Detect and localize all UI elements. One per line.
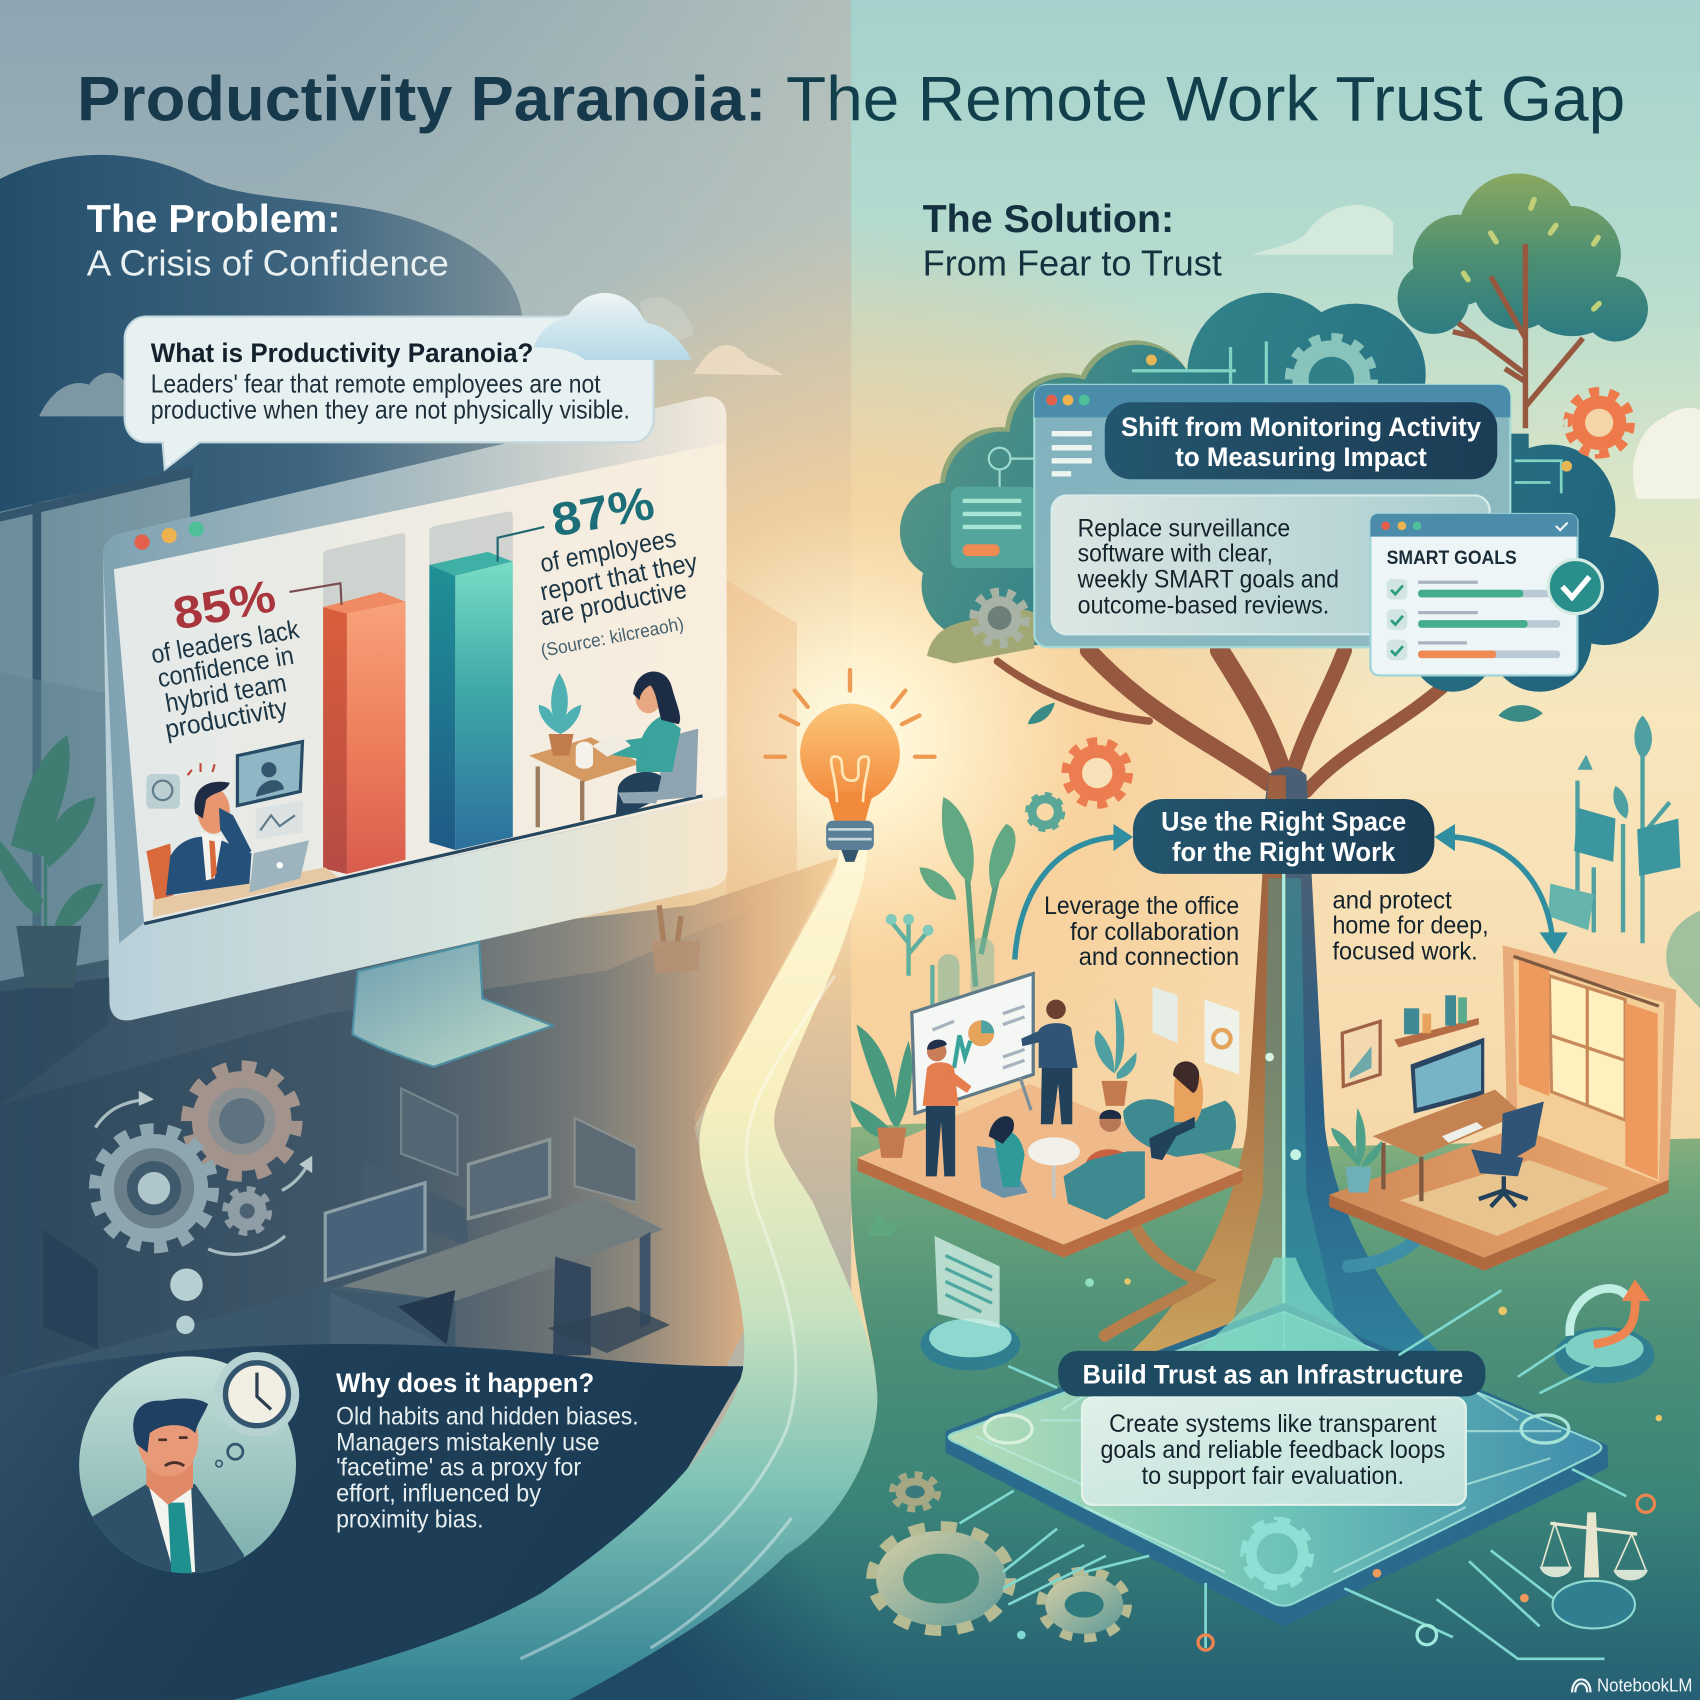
brown gear [188, 1067, 296, 1175]
leader line: 85 percent [289, 583, 342, 605]
title: The Remote Work Trust Gap [786, 64, 1625, 134]
road highlights [520, 976, 835, 1659]
office collaboration scene [850, 974, 1242, 1258]
stat: 85 percent: of leaders lack [149, 614, 302, 669]
text: protect home: home for deep, [1332, 911, 1489, 939]
arrow to home [1434, 824, 1568, 954]
orange gear mid [1066, 742, 1129, 804]
dark hill behind the problem heading [0, 155, 523, 607]
distant building silhouette [726, 580, 797, 911]
steel gear [95, 1130, 212, 1247]
home floor [1329, 1180, 1669, 1271]
card: replace surveillance: Replace surveillance [1078, 515, 1290, 543]
pill: right space: for the Right Work [1172, 836, 1396, 867]
home plant [1331, 1108, 1382, 1193]
stressed manager at a laptop [146, 742, 338, 917]
large gear [872, 1527, 1010, 1631]
window: smart goals checklist: SMART GOALS [1387, 547, 1517, 569]
heading: the problem: The Problem: [87, 198, 340, 241]
road from fear to trust [233, 824, 877, 1700]
large plant [850, 1025, 912, 1158]
clock thought [215, 1352, 299, 1467]
pill: shift heading: Shift from Monitoring Activity [1121, 411, 1481, 442]
text: why does it happen: 'facetime' as a proxy for [336, 1454, 581, 1482]
stat: 87 percent: are productive [538, 574, 689, 631]
card: create systems: to support fair evaluation. [1142, 1462, 1404, 1490]
stat: 85 percent: productivity [163, 692, 290, 744]
right ground [569, 1123, 1700, 1700]
scales of justice [1540, 1512, 1648, 1628]
window dots [134, 521, 204, 550]
heading: the problem [87, 198, 449, 283]
circuit lines [960, 1290, 1626, 1659]
text: why does it happen: effort, influenced by [336, 1480, 542, 1508]
potted plant in office [1095, 997, 1137, 1106]
text: why does it happen: Why does it happen? [336, 1367, 594, 1398]
small gear [226, 1189, 269, 1233]
speech bubble: what is productivity paranoia [125, 317, 654, 469]
circuit traces on platform [976, 1312, 1561, 1572]
green check badge [1548, 559, 1602, 614]
teal gear mid [1028, 795, 1062, 829]
text: why does it happen: Managers mistakenly use [336, 1429, 600, 1457]
background plants on the left of the tree [886, 797, 1016, 1046]
home office scene [1329, 945, 1676, 1271]
platform gear [1244, 1520, 1311, 1587]
gears of old habits [95, 1067, 312, 1254]
sunrise glow [325, 217, 1399, 1279]
pill: shift heading [1105, 402, 1497, 479]
heading: the solution: The Solution: [923, 198, 1174, 241]
monitor screen [114, 442, 725, 924]
circuit nodes [1017, 1278, 1662, 1650]
stat: 85 percent: 85% [169, 570, 280, 640]
pill: right space [1133, 799, 1434, 874]
background: left half warm lightening [271, 0, 851, 759]
floating platform base [949, 1306, 1605, 1623]
window wall with curtains [1503, 945, 1676, 1184]
card: replace surveillance: outcome-based reviews. [1078, 592, 1329, 620]
canopy details: gears and circuits [951, 338, 1572, 644]
dark floor shadow band [0, 878, 824, 1700]
speech bubble: what is productivity paranoia: productive when they are not physically visible. [151, 394, 630, 424]
stat: 87 percent: (Source: kilcreaoh) [539, 613, 685, 661]
card: create systems: goals and reliable feedback loops [1100, 1436, 1445, 1464]
stat: 85 percent: hybrid team [163, 667, 289, 718]
grass tuft [867, 1212, 902, 1236]
text: leverage the office: for collaboration [1070, 918, 1239, 946]
text: leverage the office: and connection [1079, 943, 1239, 971]
stat: 85 percent [149, 570, 302, 744]
card: replace surveillance: software with clear, [1078, 540, 1273, 568]
text: leverage the office: Leverage the office [1044, 892, 1239, 920]
pill: shift heading: to Measuring Impact [1175, 441, 1427, 472]
monitor stand [352, 942, 553, 1067]
left office floor [0, 857, 840, 1700]
small gear [892, 1474, 938, 1509]
clouds on the right [1252, 205, 1700, 499]
text: why does it happen: Old habits and hidden biases. [336, 1403, 639, 1431]
wall shelf with books [1394, 995, 1479, 1047]
card: create systems: Create systems like transparent [1109, 1410, 1437, 1438]
background: left half [0, 0, 851, 1700]
orange gear in canopy [1568, 391, 1631, 454]
light bulb [765, 670, 935, 862]
stat: 87 percent: of employees [538, 523, 678, 578]
presenter navy [1021, 1000, 1078, 1124]
bar: 85 percent leaders [323, 533, 405, 874]
text: leverage the office [1044, 892, 1239, 971]
office floor [858, 1158, 1242, 1258]
lower gears [872, 1474, 1128, 1638]
right root [1349, 1223, 1430, 1266]
card: create systems [1082, 1398, 1466, 1505]
main tree trunk [1128, 767, 1442, 1355]
dark lower-left ground [0, 1344, 748, 1700]
card: replace surveillance [1052, 495, 1490, 634]
speech bubble: what is productivity paranoia: Leaders' fear that remote employees are not [151, 368, 601, 398]
pill: build trust [1058, 1351, 1485, 1396]
home desk [1373, 1090, 1522, 1201]
background plants on the right of the tree [1548, 716, 1700, 1008]
screen base line [144, 796, 703, 924]
feedback loop icon on pedestal [1555, 1279, 1654, 1383]
tree canopy [900, 293, 1659, 692]
title [77, 64, 1625, 134]
background: right half [851, 0, 1700, 1700]
card: replace surveillance: weekly SMART goals and [1077, 566, 1339, 594]
presenter orange [923, 1040, 971, 1176]
title: Productivity Paranoia: [77, 64, 767, 134]
pill: build trust: Build Trust as an Infrastructure [1083, 1358, 1463, 1389]
heading: the problem: A Crisis of Confidence [87, 243, 449, 283]
text: why does it happen: proximity bias. [336, 1506, 484, 1534]
desk pencil cup [653, 905, 700, 974]
hologram document on pedestal [920, 1236, 1020, 1370]
heading: the solution: From Fear to Trust [923, 243, 1222, 283]
left office window wall [0, 466, 195, 1030]
monitor illustration [103, 396, 727, 1067]
left root [1105, 1220, 1203, 1336]
worried manager portrait [79, 1356, 296, 1583]
stat: 87 percent: report that they [538, 547, 700, 607]
arrow to office [1015, 824, 1133, 960]
bar: 87 percent employees [429, 512, 513, 850]
leaves on branches [1028, 703, 1543, 724]
monitor body [103, 396, 727, 1020]
potted plant left [0, 735, 103, 988]
text: why does it happen [336, 1367, 639, 1534]
leader line: 87 percent [498, 527, 544, 562]
home desktop computer [1411, 1038, 1484, 1128]
framed picture [1342, 1021, 1380, 1086]
clouds near the speech bubble [39, 297, 783, 416]
NotebookLM logo: NotebookLM [1597, 1674, 1692, 1695]
meeting table and people [977, 1110, 1145, 1220]
olive lobe at canopy edge [927, 607, 1034, 664]
rotation arrows [95, 1099, 309, 1254]
trunk base glow [1193, 1258, 1377, 1355]
medium gear [1041, 1571, 1128, 1638]
cloud over the speech bubble [533, 293, 692, 360]
pill: right space: Use the Right Space [1161, 805, 1406, 836]
text: protect home: and protect [1332, 887, 1452, 915]
whiteboard [912, 974, 1033, 1113]
woman working at a desk [529, 672, 698, 827]
text: protect home: focused work. [1332, 938, 1478, 966]
empty office desks [0, 1089, 670, 1518]
heading: the solution [923, 198, 1222, 283]
thought bubbles [170, 1268, 203, 1334]
wall posters [1152, 987, 1239, 1074]
main tree branches [997, 651, 1447, 791]
window: shift from monitoring activity [1034, 385, 1510, 647]
text: protect home [1332, 887, 1489, 966]
stat: 87 percent [538, 477, 700, 661]
stat: 87 percent: 87% [547, 477, 658, 547]
canopy olive halo [940, 340, 1195, 546]
lounge sofa with woman [1123, 1061, 1236, 1160]
goal rows [1387, 579, 1560, 660]
speech bubble: what is productivity paranoia: What is Productivity Paranoia? [151, 337, 533, 368]
dark teal corner beyond the road [569, 1523, 911, 1700]
window: smart goals checklist [1370, 514, 1602, 675]
small tree in background [1398, 173, 1648, 428]
office chair [1471, 1102, 1544, 1207]
stat: 85 percent: confidence in [155, 640, 296, 693]
